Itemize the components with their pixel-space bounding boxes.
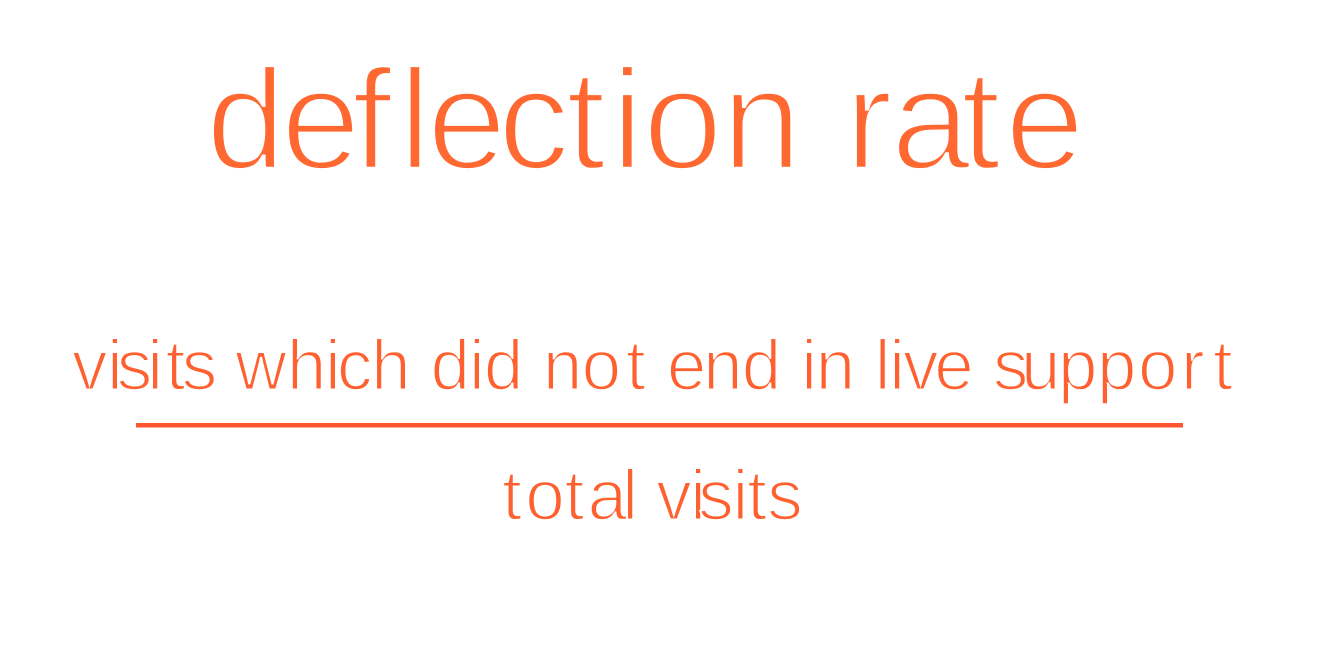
fraction line [136,423,1183,428]
title: deflection rate [206,41,1085,200]
denominator text: total visits [502,456,803,535]
numerator text: visits which did not end in live support [72,326,1233,405]
